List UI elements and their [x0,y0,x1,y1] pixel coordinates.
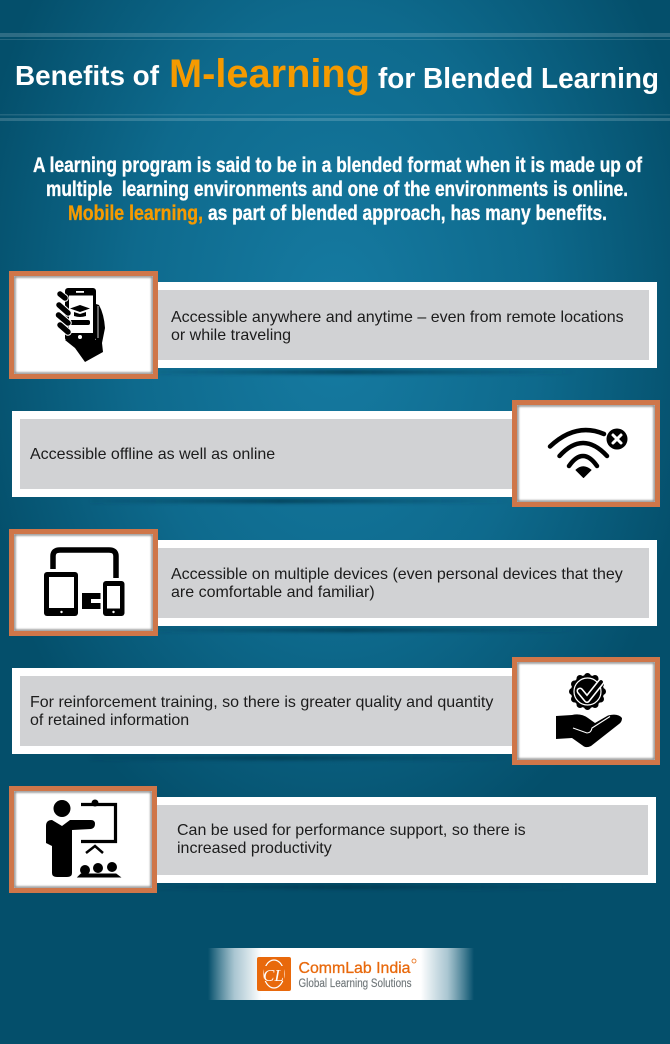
logo: CommLab India [208,948,474,1000]
title: M-learning [169,52,370,96]
title [15,52,659,96]
icon: CL mark [257,957,291,991]
text: Can be used for performance support, so there is [177,822,526,839]
title: for Blended Learning [378,63,659,95]
panel: performance support [12,788,656,890]
panel: reinforcement training [12,660,658,762]
text [171,566,623,601]
logo: CommLab India: CommLab India [298,960,411,977]
text: Accessible offline as well as online [30,446,275,463]
text: are comfortable and familiar) [171,584,375,601]
text: Accessible on multiple devices (even personal devices that they [171,566,623,583]
text: For reinforcement training, so there is greater quality and quantity [30,694,493,711]
panel: accessible anywhere [12,274,657,376]
icon: hand with quality badge [556,673,622,747]
icon: devices [44,550,124,616]
logo: CommLab India: Global Learning Solutions [298,978,412,990]
text [30,694,493,729]
text: increased productivity [177,840,332,857]
text: or while traveling [171,327,291,344]
text: of retained information [30,712,189,729]
intro paragraph [33,154,643,225]
panel: multiple devices [12,532,657,634]
header band: title [0,33,670,121]
text [177,822,526,857]
icon: hand holding phone [58,288,105,362]
title: Benefits of [15,60,160,91]
panel: offline and online [12,402,658,504]
icon: CL mark: CL [263,966,284,985]
text: Accessible anywhere and anytime – even from remote locations [171,309,624,326]
intro paragraph: Mobile learning, [68,202,203,225]
icon: presenter [46,800,120,877]
icon: wifi off [550,428,628,478]
text [171,309,624,344]
